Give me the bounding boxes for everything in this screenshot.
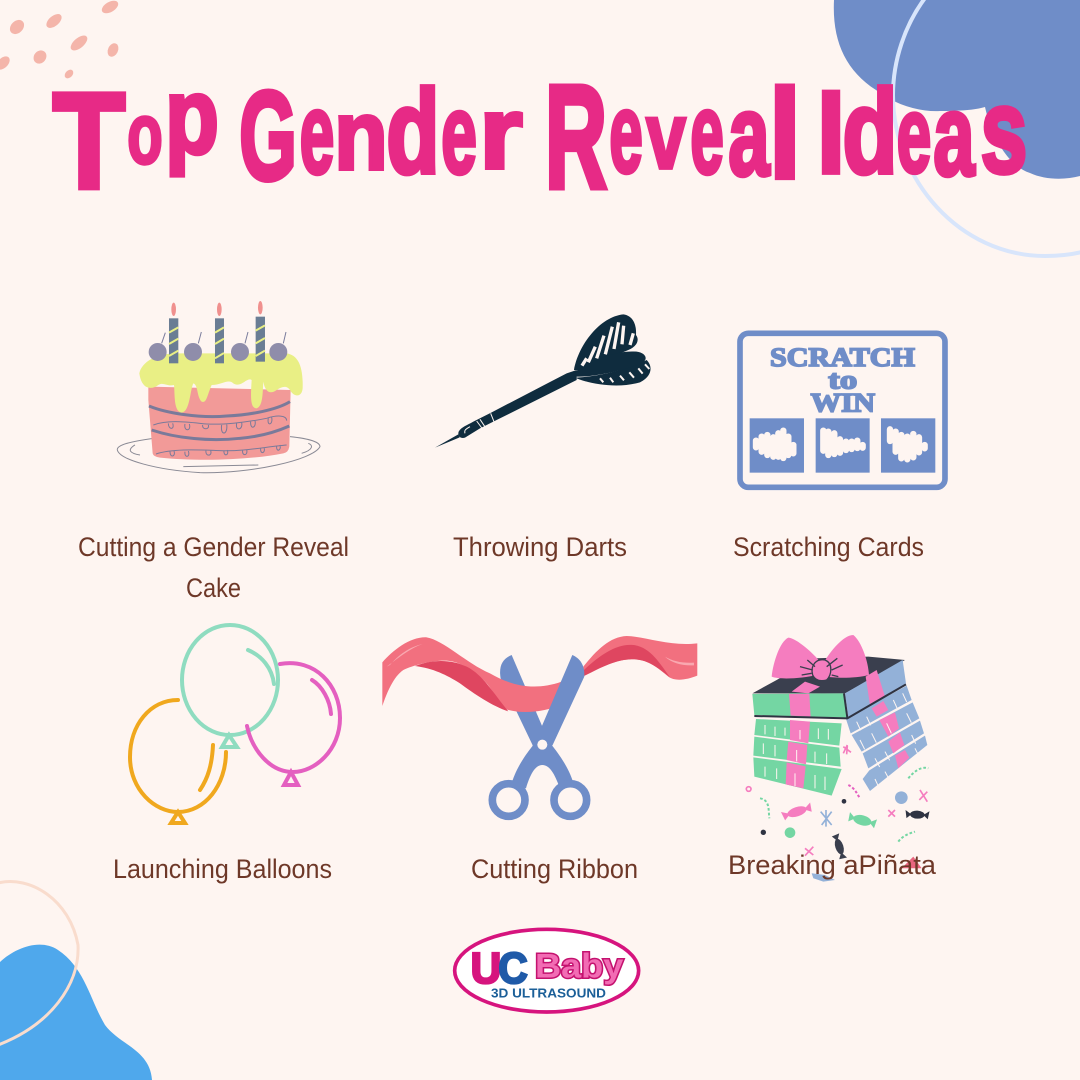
label: cake: Cake bbox=[186, 573, 241, 603]
label: cutting a gender reveal cake: Cutting a Gender Reveal bbox=[78, 532, 349, 562]
title: s bbox=[981, 65, 1027, 199]
icon: scratch card bbox=[740, 333, 945, 487]
title: e bbox=[897, 74, 931, 196]
title: a bbox=[728, 71, 770, 200]
decorative dots: top left bbox=[0, 0, 120, 80]
title: e bbox=[300, 69, 334, 198]
title: T bbox=[53, 65, 125, 218]
ring: top right outline bbox=[893, 0, 1080, 256]
logo: UC Baby 3D Ultrasound: C bbox=[498, 945, 528, 993]
title bbox=[52, 55, 1027, 220]
icon: dart bbox=[435, 314, 651, 448]
icon: balloons bbox=[130, 625, 340, 823]
icon: scratch card: SCRATCH bbox=[770, 342, 915, 372]
title: v bbox=[646, 83, 686, 189]
label: breaking a pinata: Breaking aPiñata bbox=[728, 850, 937, 880]
title: p bbox=[165, 56, 219, 177]
logo: UC Baby 3D Ultrasound: 3D ULTRASOUND bbox=[491, 985, 606, 1000]
blob: top right blue bbox=[834, 0, 1080, 179]
title: o bbox=[127, 86, 163, 182]
label: cutting ribbon: Cutting Ribbon bbox=[471, 854, 638, 884]
icon: pinata bbox=[746, 635, 930, 882]
title: d bbox=[843, 66, 897, 199]
label: launching balloons: Launching Balloons bbox=[113, 854, 332, 884]
icon: scratch card: to bbox=[828, 364, 857, 394]
title: l bbox=[769, 64, 801, 205]
blob: bottom left blue bbox=[0, 945, 152, 1080]
logo: UC Baby 3D Ultrasound: U bbox=[471, 945, 501, 993]
title: G bbox=[239, 66, 297, 207]
label: throwing darts: Throwing Darts bbox=[453, 532, 627, 562]
title: e bbox=[690, 69, 724, 198]
title: e bbox=[609, 70, 643, 197]
title: e bbox=[441, 71, 477, 198]
label: scratching cards: Scratching Cards bbox=[733, 532, 924, 562]
ring: bottom left outline bbox=[0, 882, 78, 1045]
icon: birthday cake bbox=[117, 301, 320, 473]
confetti and candies bbox=[746, 745, 930, 882]
logo: UC Baby 3D Ultrasound: Baby bbox=[535, 948, 624, 986]
title: R bbox=[545, 55, 607, 220]
title: a bbox=[933, 71, 975, 200]
icon: scissors and ribbon bbox=[382, 636, 697, 816]
logo: UC Baby 3D Ultrasound bbox=[455, 929, 639, 1012]
title: I bbox=[817, 67, 845, 198]
icon: scratch card: WIN bbox=[811, 388, 875, 418]
title: d bbox=[386, 66, 440, 199]
title: r bbox=[479, 76, 523, 190]
title: n bbox=[334, 81, 388, 190]
